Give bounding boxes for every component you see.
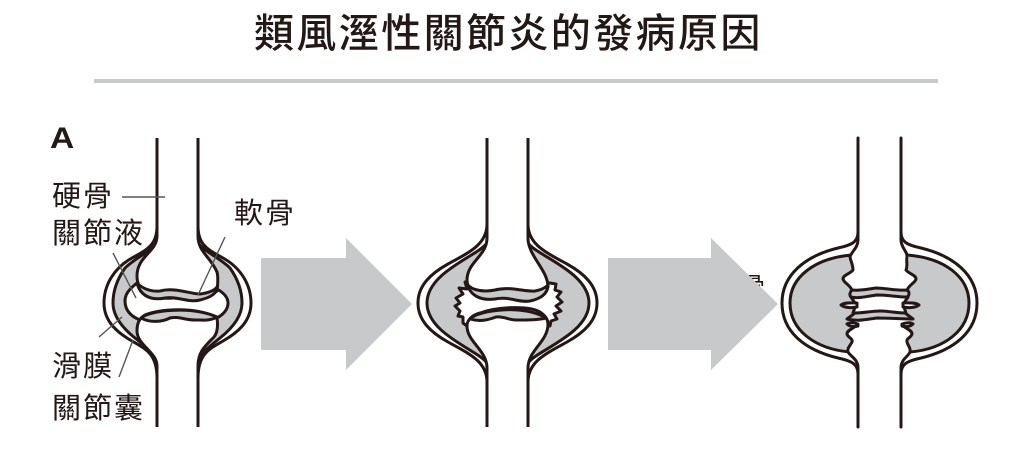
panel: destroyed joint: [782, 138, 977, 427]
bone spurs: [841, 303, 919, 327]
leader lines: [99, 197, 225, 377]
label: cartilage: 軟骨: [234, 197, 296, 230]
synovial fluid: [790, 255, 969, 352]
synovial fluid: [113, 243, 242, 362]
upper bone: [137, 138, 218, 299]
title: 類風溼性關節炎的發病原因: [254, 12, 763, 56]
destroyed bone and cavity: [843, 138, 916, 427]
upper cartilage remnant: [850, 288, 909, 298]
panel: inflamed joint: [418, 138, 597, 427]
upper cartilage: [467, 284, 548, 301]
label: joint capsule: 關節囊: [52, 392, 145, 425]
upper cartilage: [137, 283, 217, 301]
lower cartilage remnant: [847, 311, 913, 320]
joint capsule outline: [418, 224, 597, 382]
lower cartilage: [470, 310, 546, 320]
arrow 1: [261, 238, 412, 370]
lower cartilage: [141, 310, 217, 321]
labels and leader lines: [52, 181, 296, 425]
label: synovial fluid: 關節液: [52, 217, 145, 250]
lower bone: [467, 308, 548, 427]
arrow 2: [608, 238, 778, 370]
joint capsule outline: [104, 226, 251, 378]
joint capsule outline: [782, 232, 977, 374]
synovial fluid: [427, 243, 589, 363]
panel: normal joint: [104, 138, 251, 427]
inflamed cavity: [455, 282, 562, 326]
label: hard bone: 硬骨: [52, 181, 114, 213]
joint cavity: [125, 283, 228, 320]
lower bone: [137, 310, 218, 427]
clipped stray label: 骨: [741, 273, 765, 300]
label: synovium: 滑膜: [52, 350, 114, 383]
upper bone: [467, 138, 548, 298]
panel label A: A: [50, 121, 74, 155]
